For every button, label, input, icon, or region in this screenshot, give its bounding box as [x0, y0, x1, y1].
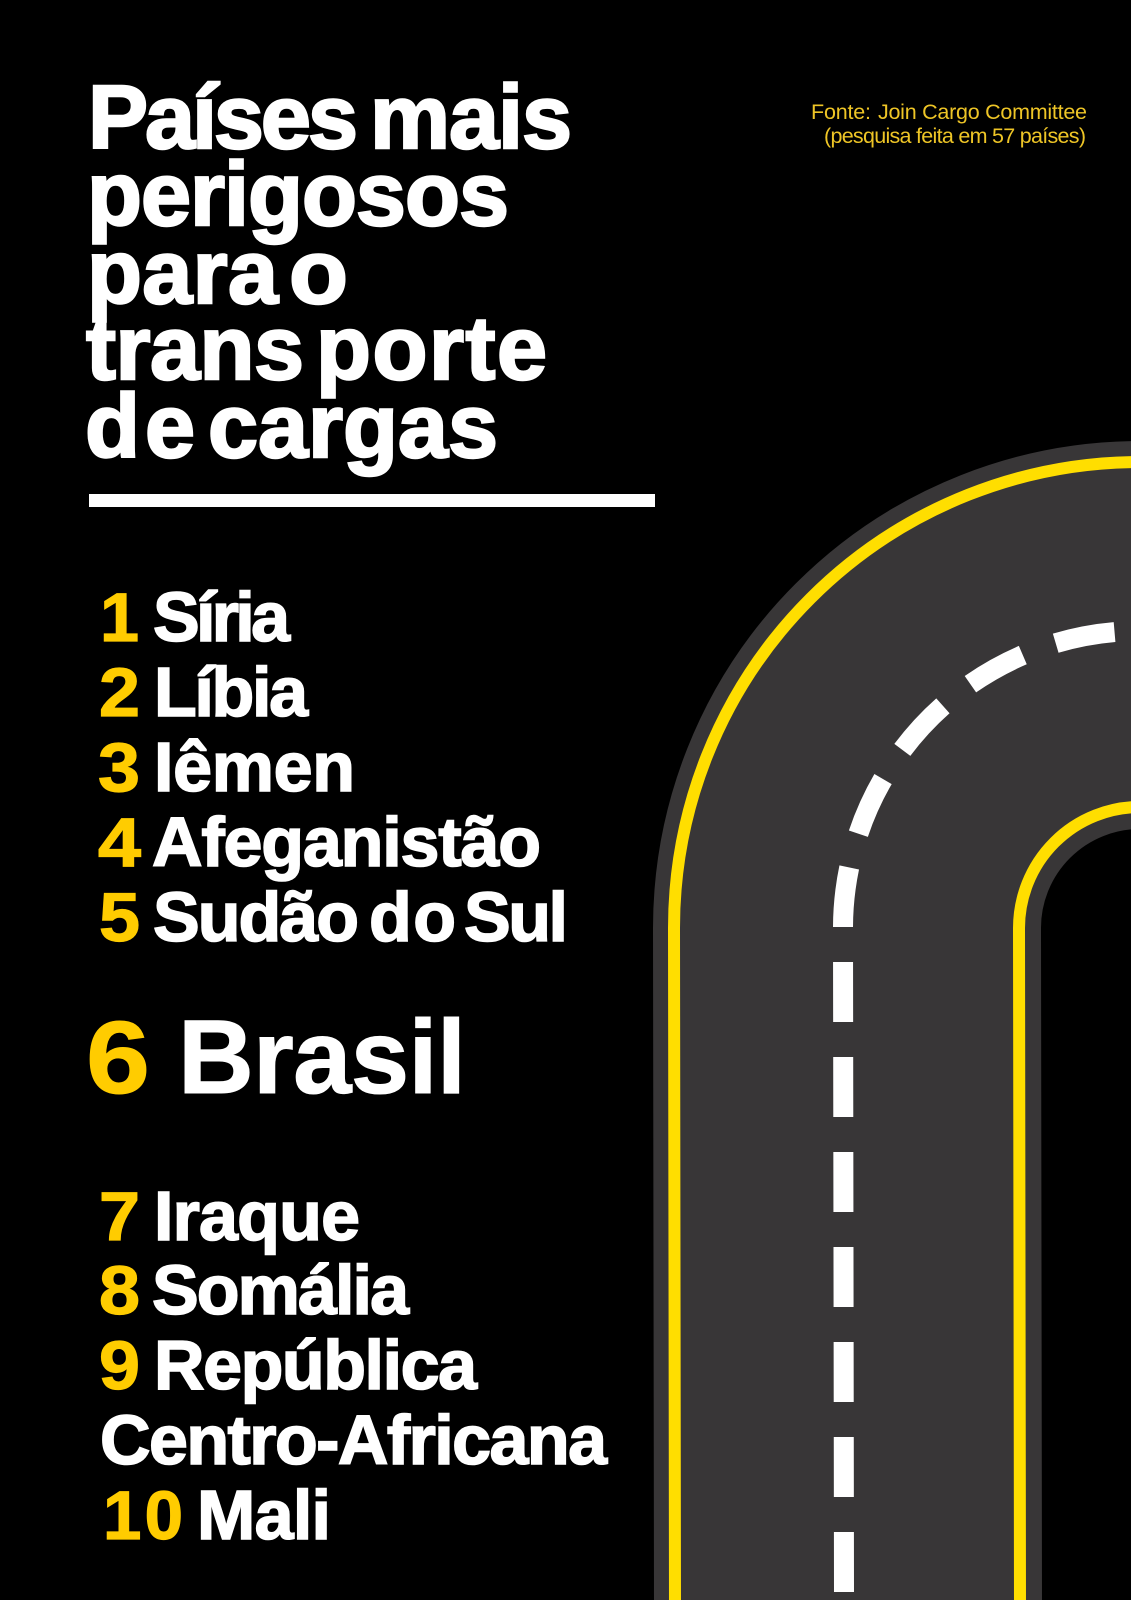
source note: Fonte:	[811, 100, 871, 124]
item 9 República Centro-Africana	[99, 1326, 608, 1479]
road surface	[847, 635, 1131, 1600]
item 5 Sudão do Sul: Sudão	[153, 878, 359, 956]
item 3 Iêmen: 3	[98, 729, 140, 806]
item 9 República Centro-Africana: República	[154, 1326, 478, 1404]
outer yellow edge line	[674, 462, 1131, 1600]
item 5 Sudão do Sul: do	[369, 878, 456, 956]
inner yellow edge line	[1019, 807, 1131, 1600]
road illustration	[674, 462, 1131, 1600]
white dashed centre line	[843, 631, 1131, 1592]
item 7 Iraque: Iraque	[154, 1177, 360, 1255]
item 10 Mali: 10	[103, 1477, 183, 1554]
highlighted item 6 Brasil: Brasil	[178, 999, 466, 1116]
item 4 Afeganistão: 4	[98, 804, 141, 881]
item 1 Síria: Síria	[153, 578, 291, 656]
item 1 Síria: 1	[100, 579, 139, 656]
item 9 República Centro-Africana: Centro-Africana	[100, 1401, 608, 1479]
title: porte	[316, 299, 547, 399]
item 8 Somália: Somália	[152, 1251, 410, 1329]
title divider bar	[89, 494, 655, 507]
item 9 República Centro-Africana: 9	[99, 1327, 140, 1404]
title: mais	[370, 68, 572, 168]
item 2 Líbia: Líbia	[154, 653, 309, 731]
item 10 Mali	[103, 1476, 331, 1554]
item 5 Sudão do Sul	[99, 878, 568, 956]
highlighted item 6 Brasil: 6	[86, 1000, 150, 1115]
item 4 Afeganistão: Afeganistão	[152, 803, 541, 881]
title: perigosos	[87, 145, 509, 245]
item 10 Mali: Mali	[197, 1476, 331, 1554]
item 3 Iêmen: Iêmen	[154, 728, 355, 806]
item 2 Líbia: 2	[99, 654, 140, 731]
item 5 Sudão do Sul: 5	[99, 879, 140, 956]
source note: Join Cargo Committee	[878, 100, 1087, 124]
item 7 Iraque: 7	[99, 1178, 140, 1255]
title: de	[85, 377, 195, 477]
title: o	[289, 223, 348, 323]
title: trans	[86, 299, 304, 399]
title	[85, 68, 572, 477]
ranking list 7 to 10	[99, 1177, 608, 1554]
source note	[811, 100, 1087, 148]
ranking list 1 to 5	[98, 578, 568, 956]
item 8 Somália: 8	[99, 1252, 140, 1329]
title: cargas	[208, 377, 498, 477]
title: Países	[88, 68, 358, 168]
title: para	[87, 223, 279, 323]
source note: (pesquisa feita em 57 países)	[824, 124, 1086, 148]
item 5 Sudão do Sul: Sul	[464, 878, 568, 956]
